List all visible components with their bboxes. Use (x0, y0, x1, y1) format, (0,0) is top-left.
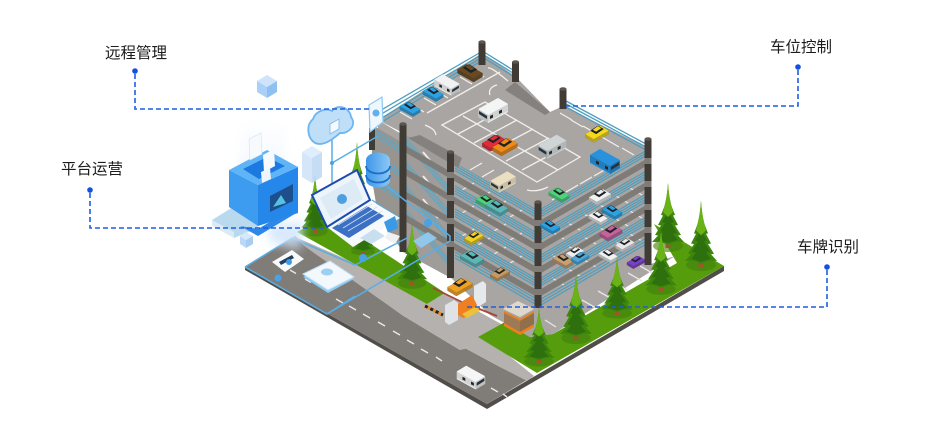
glass canopy (413, 232, 437, 248)
entrance apron (427, 293, 512, 350)
callout: 车牌识别: 车牌识别 (797, 238, 859, 256)
toll booth (503, 301, 534, 335)
callout: 平台运营: 平台运营 (61, 160, 123, 178)
ground floor stripes (513, 266, 654, 330)
left face (229, 170, 258, 226)
node dots (274, 161, 432, 282)
road (245, 236, 527, 404)
storey stripes and railings (403, 144, 648, 296)
callout: 远程管理: 远程管理 (105, 44, 167, 62)
roof deck (378, 53, 648, 210)
last rail (455, 237, 648, 305)
box base (240, 205, 298, 236)
callout: 平台运营 (61, 160, 326, 228)
small device (384, 216, 400, 244)
rear pillar (369, 128, 375, 150)
road panel small (272, 250, 304, 272)
speed bump (425, 306, 443, 315)
orange barrier unit (458, 295, 477, 318)
barrier arms (433, 288, 497, 316)
callout: 车牌识别 (466, 238, 859, 307)
icon: small cube (240, 232, 253, 248)
sidewalk (293, 236, 534, 381)
isometric ground platform (245, 215, 724, 409)
right face (258, 167, 298, 226)
green lawn right (478, 224, 724, 373)
illustration (212, 40, 724, 409)
trees (301, 142, 717, 366)
road panel large (303, 261, 354, 293)
icon: cloud (308, 107, 353, 144)
pillars (400, 40, 652, 308)
icon: stacked cubes (302, 146, 322, 183)
callout: 车位控制: 车位控制 (770, 38, 832, 56)
parking building (369, 40, 675, 337)
ramp shadows (408, 82, 550, 168)
pillar bands (447, 158, 652, 295)
icon: laptop (312, 170, 400, 247)
callout: 车位控制 (566, 38, 832, 106)
ticket machines (445, 300, 458, 325)
opening (243, 157, 285, 179)
road lane markings (290, 270, 507, 397)
connection lines (245, 136, 450, 314)
roof rail right back (484, 52, 646, 150)
entrance gate (425, 281, 497, 325)
top face (229, 150, 298, 185)
roof markings (400, 68, 634, 200)
green strip left (297, 215, 445, 304)
ramp railings (406, 138, 448, 264)
rear left floors (372, 125, 403, 252)
building body (378, 120, 675, 337)
floor shadow under box (265, 222, 305, 250)
glow behind data box (240, 125, 285, 215)
screen (270, 184, 293, 212)
icon: database (366, 152, 390, 188)
icon: top cube (257, 75, 277, 98)
ramp arrows (423, 152, 438, 218)
ramp wall (403, 130, 451, 278)
rear rails (372, 128, 400, 224)
icon: data box (212, 133, 298, 238)
documents (249, 133, 262, 160)
callout: 远程管理 (105, 44, 369, 109)
cars (400, 64, 645, 390)
icon: phone tag (369, 97, 383, 132)
conveyor (212, 199, 258, 238)
roof rail left back (376, 52, 481, 122)
